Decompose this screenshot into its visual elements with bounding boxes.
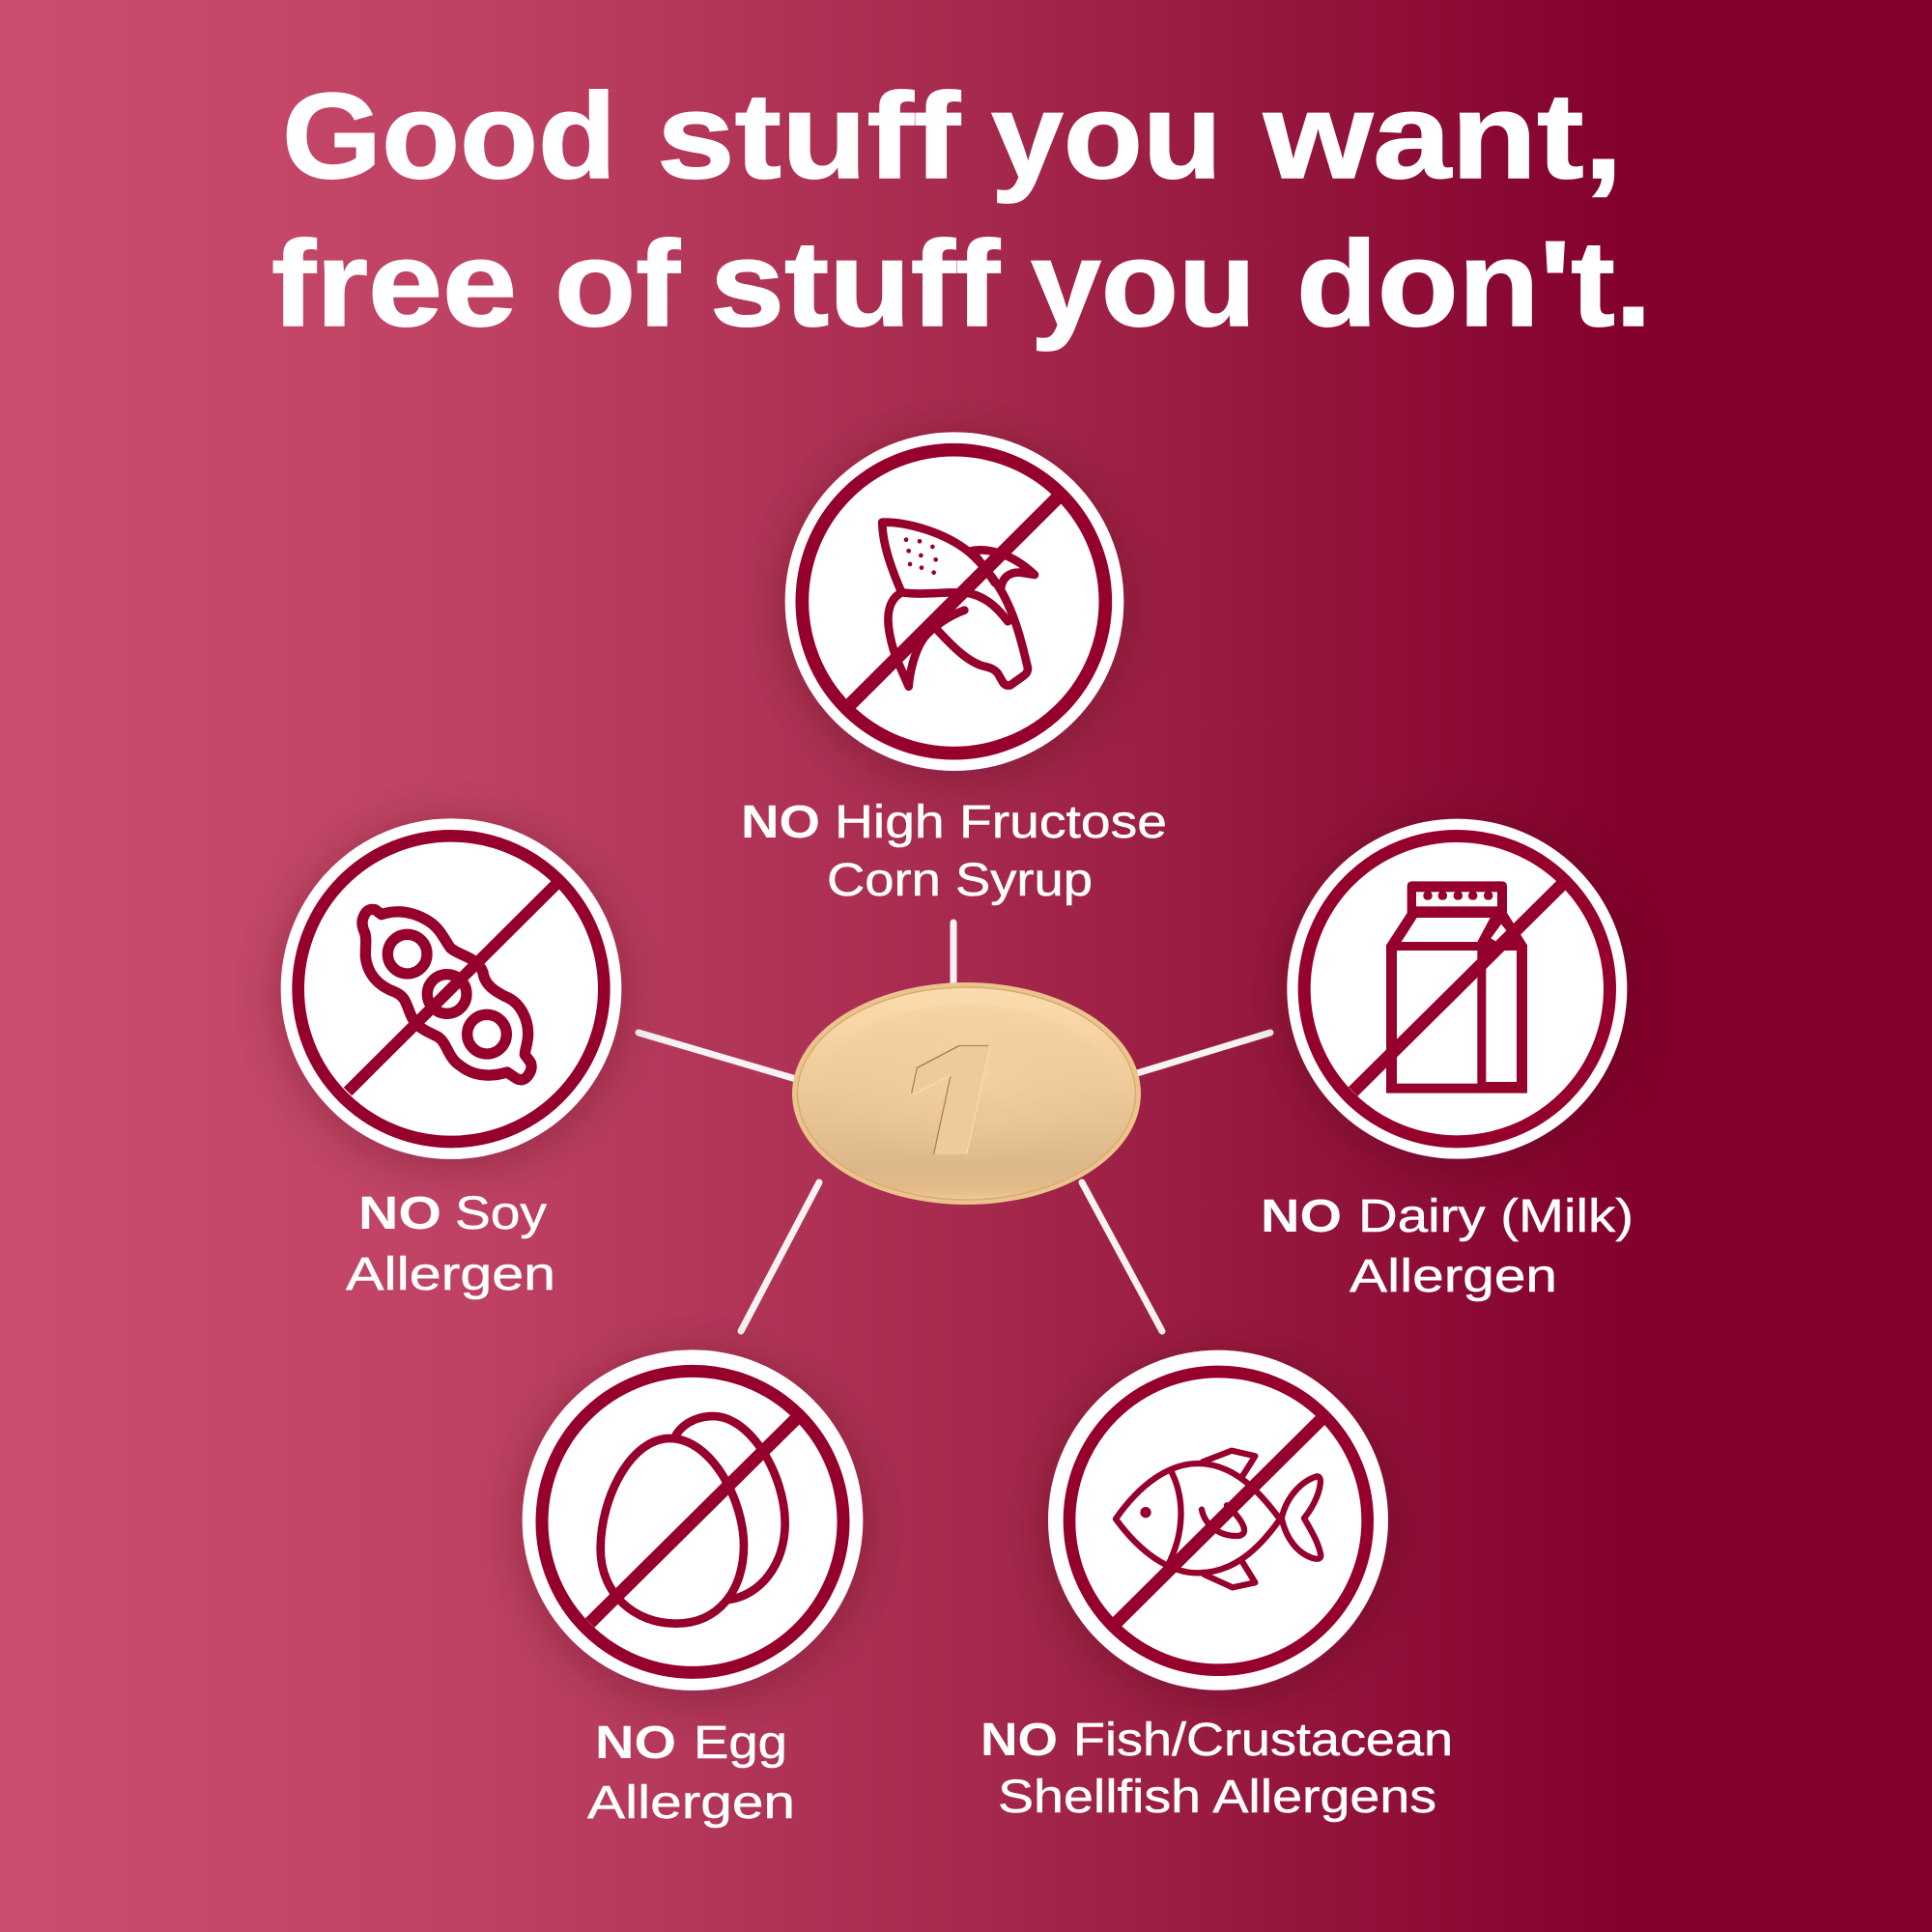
label: no egg allergen: Egg <box>694 1718 787 1769</box>
icon: eggs <box>601 1416 785 1624</box>
badge: no fish or shellfish allergens <box>1048 1350 1388 1690</box>
label: no high fructose corn syrup <box>741 797 1167 906</box>
label: no fish or crustacean shellfish allergens: Shellfish Allergens <box>998 1772 1436 1823</box>
label: no high fructose corn syrup: High Fructose <box>835 797 1167 848</box>
badge: no soy allergen <box>281 818 621 1159</box>
title <box>271 68 1652 352</box>
central tablet <box>792 982 1141 1223</box>
title: free <box>271 215 517 352</box>
label: no egg allergen: NO <box>595 1718 676 1769</box>
badge: no egg allergen <box>523 1350 863 1690</box>
icon: corn <box>882 523 1035 687</box>
title: want, <box>1263 68 1623 204</box>
title: you <box>1031 215 1256 352</box>
label: no fish or crustacean shellfish allergens: NO <box>980 1715 1058 1766</box>
title: of <box>554 215 681 352</box>
label: no egg allergen <box>587 1718 795 1829</box>
label: no soy allergen <box>346 1188 555 1300</box>
label: no soy allergen: NO <box>358 1188 441 1239</box>
icon: fish <box>1116 1451 1321 1587</box>
embossed numeral 1: 1 <box>890 1005 1008 1221</box>
label: no soy allergen: Allergen <box>346 1249 555 1300</box>
title: Good <box>282 68 616 204</box>
label: no fish or crustacean shellfish allergens: Fish/Crustacean <box>1073 1715 1453 1766</box>
label: no high fructose corn syrup: NO <box>741 797 820 848</box>
title: stuff <box>710 215 1001 352</box>
label: no egg allergen: Allergen <box>587 1777 795 1829</box>
label: no soy allergen: Soy <box>455 1188 547 1239</box>
title: stuff <box>657 68 961 204</box>
icon: soybean pod <box>362 909 531 1080</box>
title: you <box>991 68 1222 204</box>
embossed numeral 1: 1 <box>892 1007 1009 1223</box>
label: no fish or crustacean shellfish allergens <box>980 1715 1453 1823</box>
label: no dairy allergen: Dairy (Milk) <box>1358 1191 1634 1242</box>
embossed numeral 1 <box>911 1045 990 1154</box>
label: no dairy allergen: Allergen <box>1350 1251 1557 1302</box>
label: no high fructose corn syrup: Corn Syrup <box>827 855 1093 906</box>
badge: no high fructose corn syrup <box>785 432 1123 771</box>
badge: no dairy allergen <box>1287 819 1627 1159</box>
embossed numeral 1: 1 <box>891 1006 1009 1222</box>
icon: milk carton <box>1386 881 1527 1094</box>
title: don't. <box>1296 215 1652 352</box>
label: no dairy allergen <box>1261 1191 1634 1302</box>
connector lines <box>639 923 1270 1331</box>
label: no dairy allergen: NO <box>1261 1191 1342 1242</box>
